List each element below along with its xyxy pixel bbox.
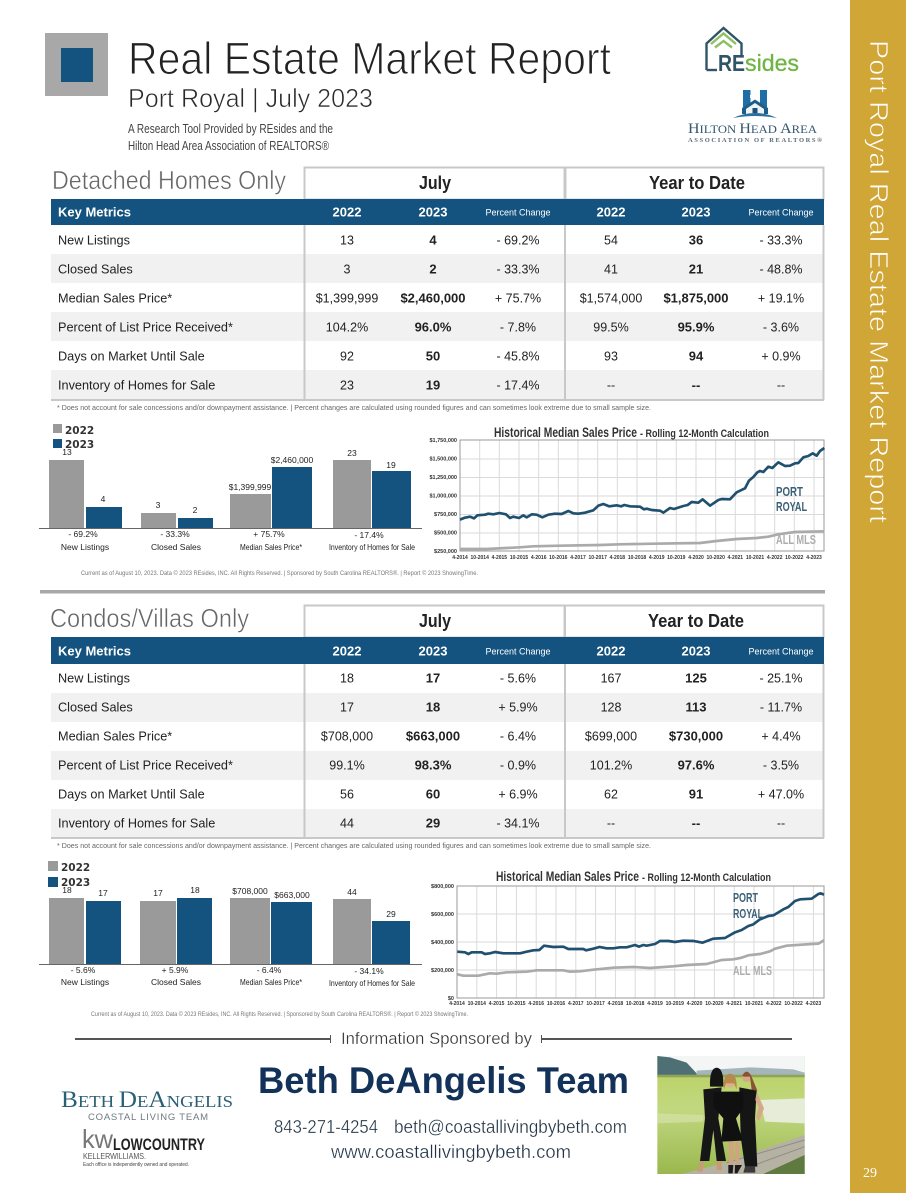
row: Inventory: --: [777, 816, 785, 830]
row: Percent of List Price Received: 97.6%: [678, 758, 715, 772]
x axis labels: 4-2014: [449, 1001, 465, 1007]
y axis labels: $600,000: [431, 912, 454, 918]
x axis labels: 4-2023: [806, 555, 822, 561]
row: Median Sales Price: $1,875,000: [663, 290, 729, 306]
row: New Listings: - 69.2%: [496, 234, 540, 248]
logo: REsides: sides: [745, 50, 799, 76]
x axis labels: 4-2021: [726, 1001, 742, 1007]
row: New Listings: [58, 232, 803, 248]
row: Closed Sales: - 11.7%: [760, 700, 802, 714]
chart title: - Rolling 12-Month Calculation: [640, 428, 769, 440]
y axis labels: $1,250,000: [429, 475, 457, 481]
row: Closed Sales: - 48.8%: [759, 262, 803, 276]
bars: Inventory: [329, 887, 415, 988]
logo: Hilton Head Area: ASSOCIATION OF REALTORS®: [688, 137, 822, 144]
sponsor heading: Information Sponsored by: [341, 1029, 532, 1048]
x axis labels: 4-2018: [608, 1001, 623, 1007]
row: Closed Sales: + 5.9%: [498, 700, 538, 714]
x axis labels: 4-2020: [688, 555, 704, 561]
bars: New Listings: [49, 447, 122, 552]
logo: Beth DeAngelis Coastal Living Team: COASTAL LIVING TEAM: [88, 1112, 208, 1123]
person: right: [739, 1072, 764, 1173]
logo: KW Lowcountry: Each office is independently owned and operated.: [83, 1162, 189, 1168]
subtitle: Port Royal | July 2023: [128, 83, 373, 113]
bars: Closed Sales: + 5.9%: [162, 965, 189, 975]
x axis labels: 10-2021: [745, 1001, 763, 1007]
y axis labels: $0: [448, 996, 454, 1002]
y axis labels: [431, 884, 454, 1002]
legend: [48, 861, 90, 889]
row: Closed Sales: - 33.3%: [496, 262, 540, 276]
x axis labels: 10-2019: [666, 1001, 684, 1007]
x axis labels: 4-2014: [452, 555, 468, 561]
column header bar: 2023: [419, 204, 447, 220]
x axis labels: 4-2015: [489, 1001, 505, 1007]
legend: 2022: [65, 425, 94, 437]
x axis labels: 4-2020: [687, 1001, 703, 1007]
column header bar: 2023: [419, 644, 447, 658]
legend: [53, 424, 94, 451]
row: Days on Market: 92: [340, 350, 354, 364]
bars: Inventory: 29: [386, 909, 396, 919]
row: Inventory: 19: [426, 378, 440, 392]
line: Port Royal: [460, 448, 824, 520]
data credit: Current as of August 10, 2023. Data © 2023 REsides, INC. All Rights Reserved. | Sponsored by South Carolina REALTORS®. | Report © 2023 ShowingTime.: [81, 569, 478, 577]
column header bar: [51, 637, 824, 664]
row: Median Sales Price: $2,460,000: [400, 290, 466, 306]
header box: July: July: [419, 611, 451, 631]
row: Closed Sales: 2: [429, 262, 437, 276]
row: Median Sales Price: + 4.4%: [761, 730, 801, 744]
label: Port Royal: [776, 485, 807, 514]
bars: Closed Sales: 2: [193, 505, 198, 515]
row: Days on Market: + 0.9%: [761, 350, 801, 364]
bars: New Listings: 4: [101, 494, 106, 504]
provider text: Hilton Head Area Association of REALTORS®: [128, 138, 329, 153]
row: Median Sales Price: + 75.7%: [495, 292, 541, 306]
bars: Median Sales Price: [229, 455, 314, 552]
chart title: [494, 425, 769, 440]
row: Inventory: Inventory of Homes for Sale: [58, 816, 215, 830]
x axis labels: 10-2021: [746, 555, 764, 561]
y axis labels: $800,000: [431, 884, 454, 890]
footnote: * Does not account for sale concessions and/or downpayment assistance. | Percent changes are calculated using rounded figures and can sometimes look extreme due to small sample size.: [57, 405, 651, 412]
row: Median Sales Price: - 6.4%: [500, 730, 536, 744]
x axis labels: 10-2017: [586, 1001, 605, 1007]
header box: Year to Date: [566, 168, 824, 200]
column header bar: Percent Change: [485, 208, 551, 218]
row: Percent of List Price Received: - 3.5%: [763, 758, 799, 772]
x axis labels: 10-2019: [667, 555, 686, 561]
row: New Listings: 54: [604, 234, 618, 248]
x axis labels: 4-2019: [649, 555, 665, 561]
bars: Closed Sales: - 33.3%: [160, 529, 190, 539]
sponsor contact: [274, 1117, 627, 1162]
header box: July: [304, 168, 564, 200]
line chart: detached homes: [429, 425, 824, 561]
header box: Year to Date: Year to Date: [649, 173, 745, 193]
row: Closed Sales: 113: [686, 700, 706, 714]
column header bar: 2023: [682, 644, 710, 658]
header box: July: [304, 606, 564, 638]
row: Median Sales Price: $708,000: [321, 730, 373, 744]
legend: 2023: [61, 877, 90, 889]
logo: Hilton Head Area: [688, 90, 822, 144]
row: Median Sales Price: $663,000: [406, 728, 460, 744]
bars: Closed Sales: [141, 500, 213, 552]
bars: Inventory: 44: [347, 887, 357, 897]
column header bar: Percent Change: [485, 646, 551, 656]
row: Closed Sales: 21: [689, 262, 703, 276]
x axis labels: 10-2015: [507, 1001, 526, 1007]
sponsor contact: beth@coastallivingbybeth.com: [394, 1117, 627, 1137]
x axis labels: 10-2017: [589, 555, 607, 561]
x axis labels: 10-2015: [510, 555, 528, 561]
x axis labels: 4-2022: [767, 555, 783, 561]
row: Closed Sales: [51, 254, 824, 283]
row: New Listings: - 33.3%: [759, 234, 803, 248]
logo: KW Lowcountry: LOWCOUNTRY: [113, 1135, 205, 1154]
logo: REsides: [706, 28, 799, 76]
bars: Closed Sales: Closed Sales: [151, 977, 201, 987]
legend: 2023: [65, 439, 94, 451]
row: Inventory: 44: [340, 816, 354, 830]
row: New Listings: 36: [689, 232, 703, 248]
x axis labels: 4-2015: [492, 555, 507, 561]
bars: Inventory: Inventory of Homes for Sale: [329, 542, 415, 552]
bars: Median Sales Price: [230, 886, 312, 987]
row: Median Sales Price: Median Sales Price*: [58, 730, 172, 744]
row: Percent of List Price Received: Percent of List Price Received*: [58, 320, 233, 334]
label: All MLS: ALL MLS: [733, 964, 772, 978]
row: Days on Market: - 45.8%: [496, 350, 540, 364]
row: Days on Market: Days on Market Until Sale: [58, 788, 205, 802]
row: Percent of List Price Received: [51, 312, 824, 341]
row: New Listings: 4: [429, 232, 437, 248]
bars: Median Sales Price: $2,460,000: [271, 455, 314, 465]
row: Percent of List Price Received: [51, 751, 824, 780]
x axis labels: 10-2020: [707, 555, 725, 561]
bars: New Listings: 13: [62, 447, 72, 457]
row: New Listings: 167: [601, 672, 621, 686]
label: Port Royal: PORT: [776, 485, 803, 499]
row: New Listings: New Listings: [58, 672, 130, 686]
x axis labels: 10-2016: [549, 555, 568, 561]
row: Closed Sales: [51, 693, 824, 722]
y axis labels: $250,000: [434, 549, 457, 555]
data credit: Current as of August 10, 2023. Data © 2023 REsides, INC. All Rights Reserved. | Sponsored by South Carolina REALTORS®. | Report © 2023 ShowingTime.: [91, 1010, 468, 1018]
sponsor contact: www.coastallivingbybeth.com: [330, 1142, 571, 1162]
line chart: condos: [431, 869, 824, 1007]
row: Days on Market: + 6.9%: [498, 788, 538, 802]
row: Inventory: 29: [426, 816, 440, 830]
x axis labels: 10-2022: [784, 1001, 803, 1007]
sponsor name: Beth DeAngelis Team: [258, 1060, 629, 1101]
row: Days on Market: 62: [604, 788, 618, 802]
row: New Listings: 13: [340, 234, 354, 248]
row: Median Sales Price: $1,574,000: [580, 292, 642, 306]
row: Days on Market: [58, 786, 804, 802]
row: Percent of List Price Received: - 0.9%: [500, 758, 536, 772]
row: Median Sales Price: $1,399,999: [316, 292, 378, 306]
column header bar: Key Metrics: [58, 204, 131, 220]
bars: Median Sales Price: $663,000: [274, 890, 310, 900]
column header bar: 2022: [597, 644, 625, 658]
logo: Beth DeAngelis Coastal Living Team: BETH DEANGELIS: [61, 1087, 233, 1112]
row: Closed Sales: 3: [344, 262, 351, 276]
x axis labels: 4-2018: [610, 555, 625, 561]
row: Closed Sales: Closed Sales: [58, 262, 133, 276]
row: New Listings: 18: [340, 672, 354, 686]
logo: REsides: RE: [718, 50, 745, 76]
row: Closed Sales: 17: [340, 700, 354, 714]
bars: Median Sales Price: - 6.4%: [257, 965, 282, 975]
x axis labels: 4-2016: [531, 555, 547, 561]
row: Days on Market: 56: [340, 788, 354, 802]
row: Closed Sales: Closed Sales: [58, 700, 133, 714]
chart title: [496, 869, 771, 884]
label: All MLS: ALL MLS: [776, 533, 816, 547]
label: Port Royal: ROYAL: [733, 907, 763, 921]
x axis labels: 10-2018: [628, 555, 646, 561]
logo: Beth DeAngelis Coastal Living Team: [61, 1087, 233, 1123]
row: New Listings: - 25.1%: [759, 672, 803, 686]
row: Closed Sales: 41: [604, 262, 618, 276]
row: Percent of List Price Received: 96.0%: [415, 320, 452, 334]
page number: 29: [863, 1166, 877, 1181]
header box: Year to Date: [565, 606, 824, 638]
line: Port Royal: [457, 893, 824, 954]
row: Percent of List Price Received: 99.5%: [593, 320, 629, 334]
row: New Listings: - 5.6%: [500, 672, 536, 686]
bars: Closed Sales: 18: [190, 885, 200, 895]
row: New Listings: 125: [685, 670, 707, 686]
bars: New Listings: - 5.6%: [71, 965, 96, 975]
row: Median Sales Price: $699,000: [585, 730, 637, 744]
x axis labels: 10-2018: [626, 1001, 645, 1007]
bars: Closed Sales: 3: [156, 500, 161, 510]
row: Days on Market: Days on Market Until Sale: [58, 350, 205, 364]
row: Days on Market: 93: [604, 350, 618, 364]
row: Days on Market: 94: [689, 348, 704, 364]
row: Percent of List Price Received: 98.3%: [415, 758, 452, 772]
bars: New Listings: 18: [62, 885, 72, 895]
bars: Inventory: - 34.1%: [354, 966, 384, 976]
person: center: [713, 1074, 743, 1173]
x axis labels: 10-2020: [705, 1001, 724, 1007]
row: Percent of List Price Received: - 3.6%: [763, 320, 799, 334]
header icon: square: [45, 33, 108, 96]
row: Median Sales Price: $730,000: [669, 728, 723, 744]
row: Inventory: --: [777, 378, 785, 392]
line: All MLS: [460, 531, 824, 549]
row: Median Sales Price: + 19.1%: [758, 292, 804, 306]
x axis labels: 10-2014: [468, 1001, 486, 1007]
column header bar: Key Metrics: [58, 644, 131, 658]
y axis labels: [429, 438, 457, 555]
x axis labels: 4-2017: [568, 1001, 584, 1007]
column header bar: 2023: [682, 204, 710, 220]
x axis labels: 10-2022: [785, 555, 804, 561]
table: detached homes: [51, 168, 824, 400]
y axis labels: $1,750,000: [429, 438, 457, 444]
provider text: [128, 121, 333, 153]
logo: KW Lowcountry: kw: [82, 1124, 113, 1154]
x axis labels: 4-2016: [528, 1001, 544, 1007]
bars: New Listings: New Listings: [61, 542, 109, 552]
row: New Listings: [58, 670, 803, 686]
row: Closed Sales: 128: [601, 700, 621, 714]
provider text: A Research Tool Provided by REsides and the: [128, 121, 333, 136]
sponsor heading: [75, 1029, 792, 1048]
logo: KW Lowcountry: KELLERWILLIAMS.: [83, 1152, 146, 1161]
table: condos: [51, 606, 824, 838]
bars: Closed Sales: [140, 885, 212, 987]
x axis labels: 4-2017: [570, 555, 586, 561]
bars: Inventory: 19: [386, 460, 396, 470]
x axis labels: 4-2023: [806, 1001, 821, 1007]
x axis labels: 4-2021: [728, 555, 743, 561]
legend: 2022: [61, 862, 90, 874]
row: New Listings: New Listings: [58, 234, 130, 248]
row: Days on Market: 50: [426, 348, 440, 364]
row: Percent of List Price Received: 101.2%: [590, 758, 632, 772]
sidebar title: Port Royal Real Estate Market Report: [864, 40, 894, 524]
column header bar: Percent Change: [748, 208, 814, 218]
bars: Median Sales Price: $1,399,999: [229, 482, 272, 492]
row: Days on Market: 91: [689, 786, 703, 802]
row: Inventory: --: [607, 816, 615, 830]
row: Inventory: --: [692, 378, 700, 392]
row: New Listings: 17: [426, 670, 440, 686]
label: Port Royal: PORT: [733, 891, 758, 905]
gold sidebar: [850, 0, 906, 1193]
row: Inventory: [51, 370, 824, 399]
bars: Closed Sales: 17: [153, 888, 163, 898]
row: Percent of List Price Received: Percent of List Price Received*: [58, 758, 233, 772]
row: Percent of List Price Received: 95.9%: [678, 320, 715, 334]
bars: Closed Sales: Closed Sales: [151, 542, 201, 552]
x axis labels: 10-2014: [471, 555, 489, 561]
y axis labels: $1,500,000: [429, 456, 457, 462]
row: Inventory: 23: [340, 378, 354, 392]
y axis labels: $500,000: [434, 530, 457, 536]
row: Median Sales Price: [58, 728, 801, 744]
y axis labels: $1,000,000: [429, 494, 457, 500]
label: Port Royal: [733, 891, 763, 921]
row: Median Sales Price: Median Sales Price*: [58, 292, 172, 306]
y axis labels: $400,000: [431, 940, 454, 946]
y axis labels: $200,000: [431, 968, 454, 974]
chart title: Historical Median Sales Price: [494, 425, 637, 440]
x axis labels: 4-2019: [647, 1001, 663, 1007]
row: Inventory: - 17.4%: [496, 378, 540, 392]
row: Inventory: Inventory of Homes for Sale: [58, 378, 215, 392]
row: Days on Market: 60: [426, 786, 440, 802]
row: Percent of List Price Received: - 7.8%: [500, 320, 536, 334]
x axis labels: [452, 555, 822, 561]
row: Inventory: --: [607, 378, 615, 392]
bars: Inventory: 23: [347, 448, 357, 458]
x axis labels: 10-2016: [547, 1001, 565, 1007]
row: Percent of List Price Received: 99.1%: [329, 758, 365, 772]
sponsor contact: 843-271-4254: [274, 1117, 378, 1137]
section heading: condos: Condos/Villas Only: [50, 603, 249, 633]
row: Inventory: --: [692, 816, 700, 830]
bars: New Listings: New Listings: [61, 977, 109, 987]
logo: KW Lowcountry: [82, 1124, 205, 1168]
y axis labels: $750,000: [434, 512, 457, 518]
row: Days on Market: + 47.0%: [758, 788, 804, 802]
bars: New Listings: - 69.2%: [68, 529, 98, 539]
row: Percent of List Price Received: 104.2%: [326, 320, 368, 334]
bars: Median Sales Price: Median Sales Price*: [240, 542, 303, 552]
footnote: * Does not account for sale concessions and/or downpayment assistance. | Percent changes are calculated using rounded figures and can sometimes look extreme due to small sample size.: [57, 843, 651, 850]
x axis labels: [449, 1001, 821, 1007]
bars: New Listings: 17: [98, 888, 108, 898]
bars: Inventory: [329, 448, 415, 552]
logo: Hilton Head Area: HILTON HEAD AREA: [688, 121, 818, 137]
chart title: Historical Median Sales Price: [496, 869, 639, 884]
row: Median Sales Price: [58, 290, 804, 306]
column header bar: Percent Change: [748, 646, 814, 656]
column header bar: 2022: [333, 204, 361, 220]
title: Real Estate Market Report: [128, 33, 611, 84]
header box: Year to Date: Year to Date: [648, 611, 744, 631]
section heading: detached homes: Detached Homes Only: [52, 165, 286, 195]
row: Days on Market: [58, 348, 801, 364]
person: left: [697, 1068, 726, 1172]
x axis labels: 4-2022: [766, 1001, 782, 1007]
chart title: - Rolling 12-Month Calculation: [642, 872, 771, 884]
bars: Median Sales Price: Median Sales Price*: [240, 977, 303, 987]
line: All MLS: [457, 940, 824, 976]
bars: Inventory: Inventory of Homes for Sale: [329, 978, 415, 988]
bars: Inventory: - 17.4%: [354, 530, 384, 540]
photo: team on marsh boardwalk: [657, 1056, 805, 1174]
column header bar: [51, 199, 824, 225]
column header bar: 2022: [333, 644, 361, 658]
header box: July: July: [419, 173, 451, 193]
row: Inventory: [51, 809, 824, 838]
row: Closed Sales: 18: [426, 700, 440, 714]
bars: Median Sales Price: $708,000: [232, 886, 268, 896]
bar chart: detached homes: [39, 424, 422, 552]
row: Inventory: - 34.1%: [496, 816, 540, 830]
label: Port Royal: ROYAL: [776, 500, 807, 514]
bars: New Listings: [49, 885, 121, 987]
bars: Median Sales Price: + 75.7%: [253, 529, 285, 539]
bar chart: condos: [39, 861, 422, 988]
column header bar: 2022: [597, 204, 625, 220]
